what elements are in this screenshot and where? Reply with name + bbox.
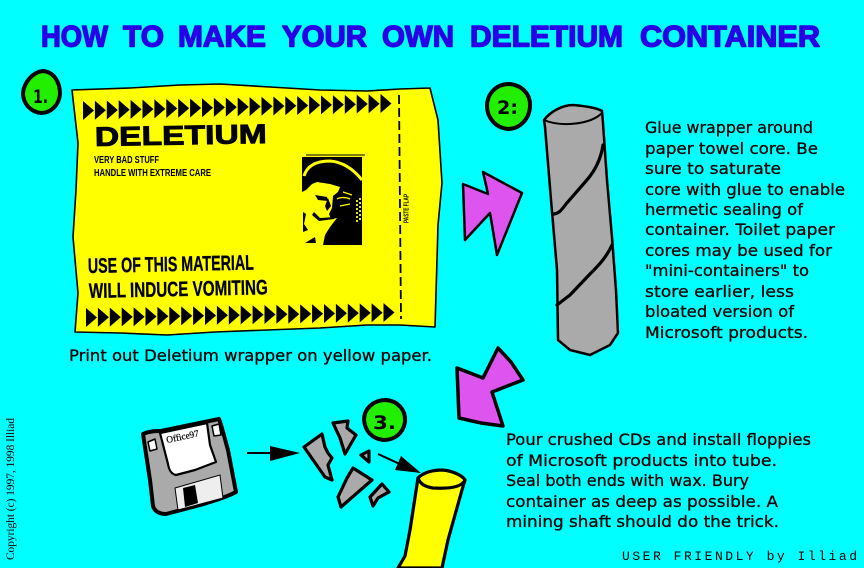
- step 2 instructions: bloated version of: [645, 302, 794, 321]
- step 2 instructions: cores may be used for: [645, 241, 832, 260]
- wrapper warning large: WILL INDUCE VOMITING: [89, 276, 268, 303]
- portrait photo: [302, 155, 365, 245]
- step 2 instructions: container. Toilet paper: [645, 220, 835, 239]
- step 3 instructions: Pour crushed CDs and install floppies: [506, 430, 811, 449]
- paste flap fold line: [399, 95, 401, 319]
- title: CONTAINER: [640, 20, 820, 54]
- paste flap label: PASTE FLAP: [402, 194, 410, 223]
- step 2 instructions: Glue wrapper around: [645, 118, 813, 137]
- bottom arrow strip: [86, 303, 394, 327]
- step 3 instructions: Seal both ends with wax. Bury: [506, 471, 749, 490]
- title: OWN: [382, 20, 454, 54]
- step 2 badge: 2:: [497, 97, 518, 119]
- step 2 instructions: [645, 118, 845, 342]
- step 1 caption: Print out Deletium wrapper on yellow paper.: [69, 346, 432, 365]
- top arrow strip: [83, 94, 391, 120]
- title: TO: [123, 20, 164, 54]
- title: MAKE: [178, 20, 266, 54]
- step 1 badge: 1.: [33, 86, 48, 108]
- title: HOW: [41, 20, 109, 54]
- step 2 instructions: sure to saturate: [645, 159, 781, 178]
- step 2 instructions: paper towel core. Be: [645, 139, 818, 158]
- arrow: shards to tube: [378, 454, 421, 473]
- disk write-protect notches: [148, 424, 221, 451]
- wrapper warning small: [94, 154, 211, 179]
- step 1 badge: [23, 71, 60, 113]
- step 2 instructions: "mini-containers" to: [645, 261, 809, 280]
- title: DELETIUM: [470, 20, 623, 54]
- step 2 badge: [487, 84, 530, 129]
- disk shutter: [175, 475, 223, 510]
- arrow: floppy to shards: [247, 446, 300, 461]
- wrapper warning small: HANDLE WITH EXTREME CARE: [94, 167, 211, 179]
- step 2 instructions: store earlier, less: [645, 282, 794, 301]
- title: YOUR: [282, 20, 367, 54]
- step 3 instructions: of Microsoft products into tube.: [506, 451, 777, 470]
- step 3 instructions: mining shaft should do the trick.: [506, 512, 779, 531]
- title: [41, 20, 820, 54]
- step 3 badge: 3.: [373, 412, 396, 434]
- crushed disc shards: [304, 421, 389, 507]
- paper towel core tube: [544, 105, 618, 355]
- panel: Deletium wrapper: [72, 84, 442, 335]
- arrow: step 2 to step 3: [457, 348, 523, 426]
- wrapper warning large: USE OF THIS MATERIAL: [88, 252, 254, 278]
- step 3 instructions: [506, 430, 811, 531]
- wrapper warning large: [88, 252, 268, 303]
- disk shutter window: [183, 485, 198, 507]
- yellow wrapped tube: [398, 470, 465, 568]
- disk label text: Office97: [165, 428, 200, 446]
- wrapper warning small: VERY BAD STUFF: [94, 154, 159, 166]
- step 2 instructions: Microsoft products.: [645, 323, 808, 342]
- credit: USER FRIENDLY by Illiad: [622, 549, 857, 564]
- wrapper logo: DELETIUM: [95, 119, 267, 152]
- step 2 instructions: hermetic sealing of: [645, 200, 803, 219]
- step 3 badge: [364, 400, 405, 440]
- step 3 instructions: container as deep as possible. A: [506, 492, 778, 511]
- step 2 instructions: core with glue to enable: [645, 180, 845, 199]
- floppy disk: [143, 419, 236, 514]
- disk label: [160, 423, 216, 475]
- copyright: Copyright (c) 1997, 1998 Illiad: [3, 418, 17, 560]
- arrow: step 1 to step 2: [463, 172, 522, 255]
